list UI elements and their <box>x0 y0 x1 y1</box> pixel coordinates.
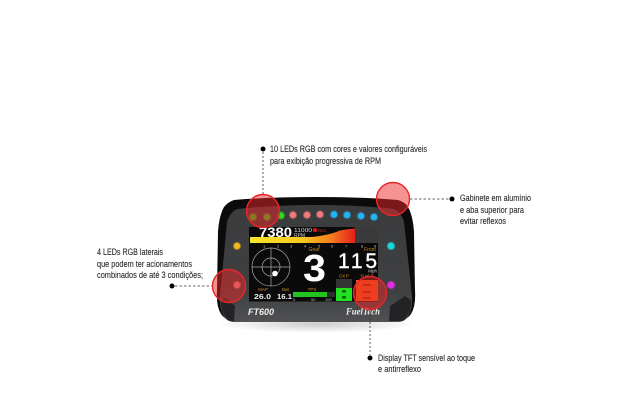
RPM readout: REC <box>318 228 327 233</box>
TPS bar: TPS <box>308 287 316 292</box>
RPM scale: 1 <box>263 244 266 248</box>
highlight circle: side LEDs <box>212 270 246 302</box>
MAP readout <box>254 287 271 301</box>
callout: display: e antirreflexo <box>378 364 421 375</box>
battery readout: 16.1 <box>277 292 292 301</box>
device: FT600 dashboard <box>216 197 416 333</box>
G-force dial <box>252 248 290 286</box>
speed: 115 <box>338 250 377 273</box>
RPM scale: 2 <box>277 244 280 248</box>
TPS bar <box>293 287 335 302</box>
RPM scale <box>263 244 377 248</box>
callout: housing <box>410 193 531 227</box>
callout: side LEDs: 4 LEDs RGB laterais <box>97 247 163 258</box>
battery readout: Bat. <box>282 287 290 292</box>
RPM readout <box>259 224 327 240</box>
callout: display: Display TFT sensível ao toque <box>378 353 475 364</box>
battery readout <box>277 287 292 301</box>
callout: top LEDs: para exibição progressiva de RPM <box>270 156 381 167</box>
RPM readout: RPM <box>294 233 305 239</box>
TPS bar: 0 <box>293 297 296 302</box>
TPS bar: 100 <box>325 297 332 302</box>
highlight circle: display <box>354 276 386 310</box>
gear: Gear <box>308 247 320 253</box>
RPM scale: 9 <box>374 244 377 248</box>
RPM bar <box>250 227 378 243</box>
RPM readout: 11000 <box>294 228 312 234</box>
callout: top LEDs: 10 LEDs RGB com cores e valores configuráveis <box>270 144 427 155</box>
device body <box>217 197 415 322</box>
MAP readout: MAP <box>258 287 268 292</box>
gear: 3 <box>303 248 326 290</box>
callout: side LEDs: combinados de até 3 condições; <box>97 270 203 281</box>
callout: side LEDs: que podem ter acionamentos <box>97 259 192 270</box>
RPM scale: 7 <box>345 244 348 248</box>
right corner piece <box>389 296 411 321</box>
speed: Mph <box>368 268 377 274</box>
MAP readout: 26.0 <box>254 292 271 301</box>
top RGB LEDs <box>249 211 378 221</box>
RPM scale: 4 <box>304 244 307 248</box>
device shadow <box>216 315 416 333</box>
callout: display <box>368 310 475 375</box>
logo: FuelTech: FuelTech <box>345 306 380 316</box>
callout: housing: evitar reflexos <box>460 216 506 227</box>
callout: housing: Gabinete em alumínio <box>460 193 531 204</box>
TPS bar: 50 <box>311 297 316 302</box>
RPM scale: 6 <box>331 244 334 248</box>
device face <box>220 205 412 322</box>
RPM scale: 3 <box>290 244 293 248</box>
highlight circle: housing <box>376 182 410 216</box>
oil pressure gauge: Oil P <box>339 274 349 278</box>
highlight circle: top LEDs <box>246 194 280 228</box>
fuel pressure gauge: Fuel P <box>360 274 374 278</box>
RPM scale: 8 <box>361 244 364 248</box>
RPM readout: 7380 <box>259 224 292 240</box>
callout: housing: e aba superior para <box>460 205 525 216</box>
left corner piece <box>221 298 235 321</box>
side RGB LEDs <box>233 242 395 289</box>
callout: top LEDs <box>260 144 427 194</box>
TFT display <box>249 224 378 302</box>
callout: side LEDs <box>97 247 212 288</box>
RPM scale: 5 <box>318 244 321 248</box>
logo: FT600: FT600 <box>248 307 274 317</box>
speed: Front <box>364 247 376 253</box>
